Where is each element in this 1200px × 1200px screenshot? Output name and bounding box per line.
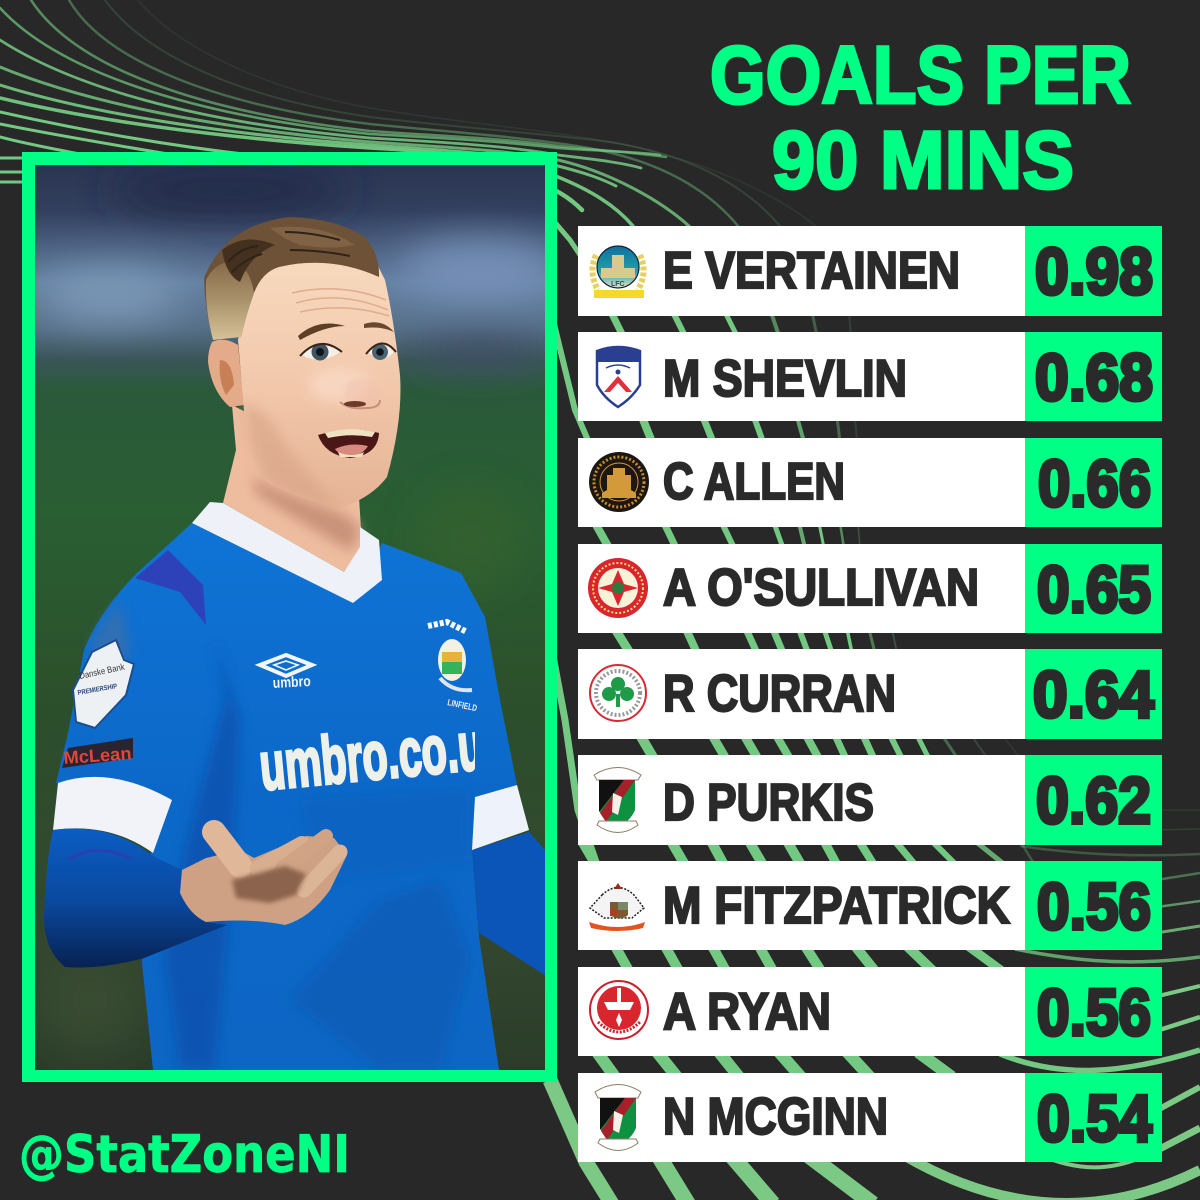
value: 0.56: [1037, 869, 1151, 943]
hair: [204, 217, 379, 340]
crest: Cliftonville: [590, 665, 646, 721]
row 3: C Allen: [578, 438, 1162, 527]
shirt shading: [92, 600, 470, 1070]
left sleeve white band: [53, 777, 172, 853]
background swoosh lines: upper fan: [0, 0, 816, 862]
hand: [180, 832, 347, 925]
right forearm: [472, 832, 545, 975]
sleeve badge: [73, 640, 134, 728]
face shading: [244, 367, 372, 506]
name: D PURKIS: [663, 774, 874, 832]
value: 0.65: [1037, 552, 1151, 626]
club crest: LINFIELD: [447, 697, 478, 713]
value: 0.66: [1038, 446, 1151, 520]
crest: Ballymena: [589, 883, 645, 931]
crest: Larne: [590, 981, 648, 1039]
sleeve sponsor: McLean: McLean: [63, 743, 132, 768]
crest: Coleraine: [597, 347, 640, 407]
ear: [208, 340, 244, 407]
crest: Glentoran: [594, 768, 641, 832]
right sleeve white band: [472, 785, 529, 850]
club crest: [428, 622, 478, 713]
forehead wrinkles: [292, 289, 389, 316]
name: E VERTAINEN: [663, 242, 960, 300]
name: A O'SULLIVAN: [663, 559, 979, 617]
value: 0.64: [1033, 657, 1154, 731]
row 4: A O'Sullivan: [578, 544, 1162, 633]
name: C ALLEN: [663, 453, 845, 511]
photo panel: player in blue kit: [22, 152, 560, 1082]
value: 0.62: [1036, 763, 1151, 837]
row 5: R Curran: [578, 649, 1162, 739]
neck: [223, 405, 362, 572]
shirt body: [56, 523, 517, 1070]
background swoosh lines: right side arcs and bottom fan: [550, 810, 1200, 1200]
crest: Glentoran: [595, 1084, 641, 1150]
sleeve badge: PREMIERSHIP: [77, 683, 118, 697]
title: [710, 30, 1131, 206]
crest: Linfield: LFC: [611, 281, 625, 288]
brows: [298, 324, 345, 340]
name: A RYAN: [663, 983, 831, 1041]
mouth: [318, 429, 379, 458]
name: M FITZPATRICK: [663, 877, 1010, 935]
value: 0.98: [1035, 234, 1153, 308]
crest: Portadown: [588, 558, 648, 618]
row 1: E Vertainen: [578, 226, 1162, 316]
crest: Linfield: [592, 246, 644, 298]
chest logo: umbro: [260, 655, 312, 692]
handle: @StatZoneNI: [19, 1125, 350, 1185]
name: M SHEVLIN: [663, 350, 907, 408]
background swoosh lines: row gap strips: [582, 312, 1200, 1077]
sleeve badge: Danske Bank: [78, 662, 126, 681]
arm seam: [68, 850, 130, 860]
row 2: M Shevlin: [578, 332, 1162, 421]
value: 0.54: [1037, 1081, 1152, 1155]
left forearm: [44, 828, 227, 968]
row 8: A Ryan: [578, 967, 1162, 1056]
row 7: M Fitzpatrick: [578, 861, 1162, 950]
shoulder stripe: [135, 550, 206, 625]
sponsor text: umbro.co.uk: umbro.co.u: [256, 708, 486, 805]
face: [238, 250, 400, 508]
row 9: N McGinn: [578, 1073, 1162, 1162]
value: 0.68: [1035, 340, 1153, 414]
row 6: D Purkis: [578, 755, 1162, 845]
crest: Carrick Rangers: [589, 452, 649, 512]
title: 90 MINS: [772, 115, 1074, 206]
name: R CURRAN: [663, 665, 896, 723]
value: 0.56: [1037, 975, 1151, 1049]
chest logo: umbro: umbro: [272, 673, 311, 692]
collar: [192, 502, 382, 603]
name: N MCGINN: [663, 1088, 888, 1146]
eyes: [300, 343, 396, 360]
nose: [340, 378, 380, 408]
title: GOALS PER: [710, 30, 1131, 121]
